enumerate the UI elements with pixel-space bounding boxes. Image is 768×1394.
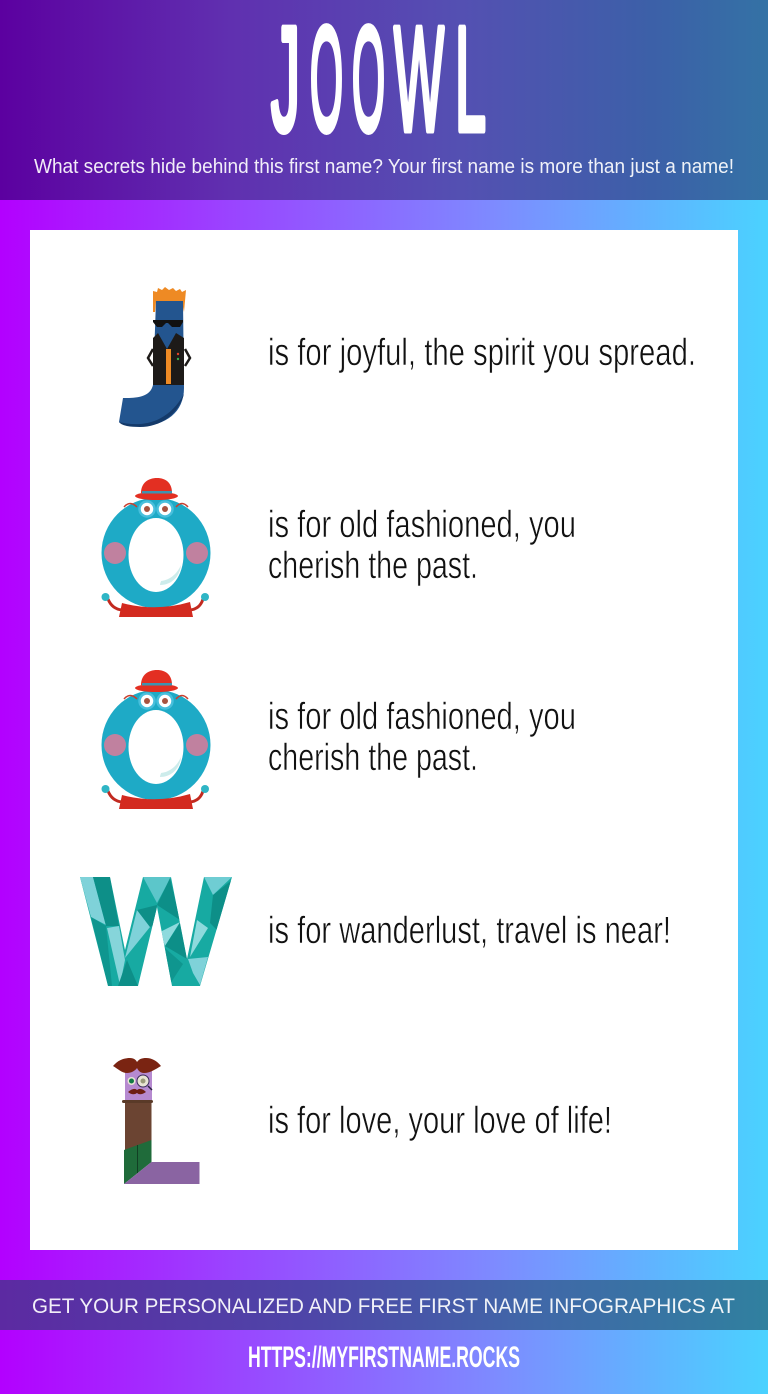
icon: letter L character [113, 1058, 200, 1184]
text: L line: is for love, your love of life! [268, 1100, 612, 1142]
title: J [271, 0, 300, 162]
footer text: GET YOUR PERSONALIZED AND FREE FIRST NAME INFOGRAPHICS AT [32, 1295, 735, 1318]
text: first O lines: is for old fashioned, you [268, 504, 576, 546]
icon: faceted letter W [78, 875, 234, 988]
title: O [310, 0, 343, 162]
text: second O lines: cherish the past. [268, 737, 478, 779]
white content panel [30, 230, 738, 1250]
icon: letter O character [102, 478, 210, 617]
text: first O lines: cherish the past. [268, 545, 478, 587]
footer url: HTTPS://MYFIRSTNAME.ROCKS [248, 1341, 520, 1374]
footer call-to-action band [0, 1280, 768, 1330]
header band [0, 0, 768, 200]
text: first O lines [268, 504, 576, 587]
text: second O lines: is for old fashioned, you [268, 696, 576, 738]
text: second O lines [268, 696, 576, 779]
title: O [352, 0, 385, 162]
icon: second letter O character [102, 670, 210, 809]
subtitle: What secrets hide behind this first name? Your first name is more than just a name! [34, 156, 734, 178]
icon: letter J character [119, 287, 190, 427]
header band: L [455, 0, 486, 162]
title: W [394, 0, 444, 162]
